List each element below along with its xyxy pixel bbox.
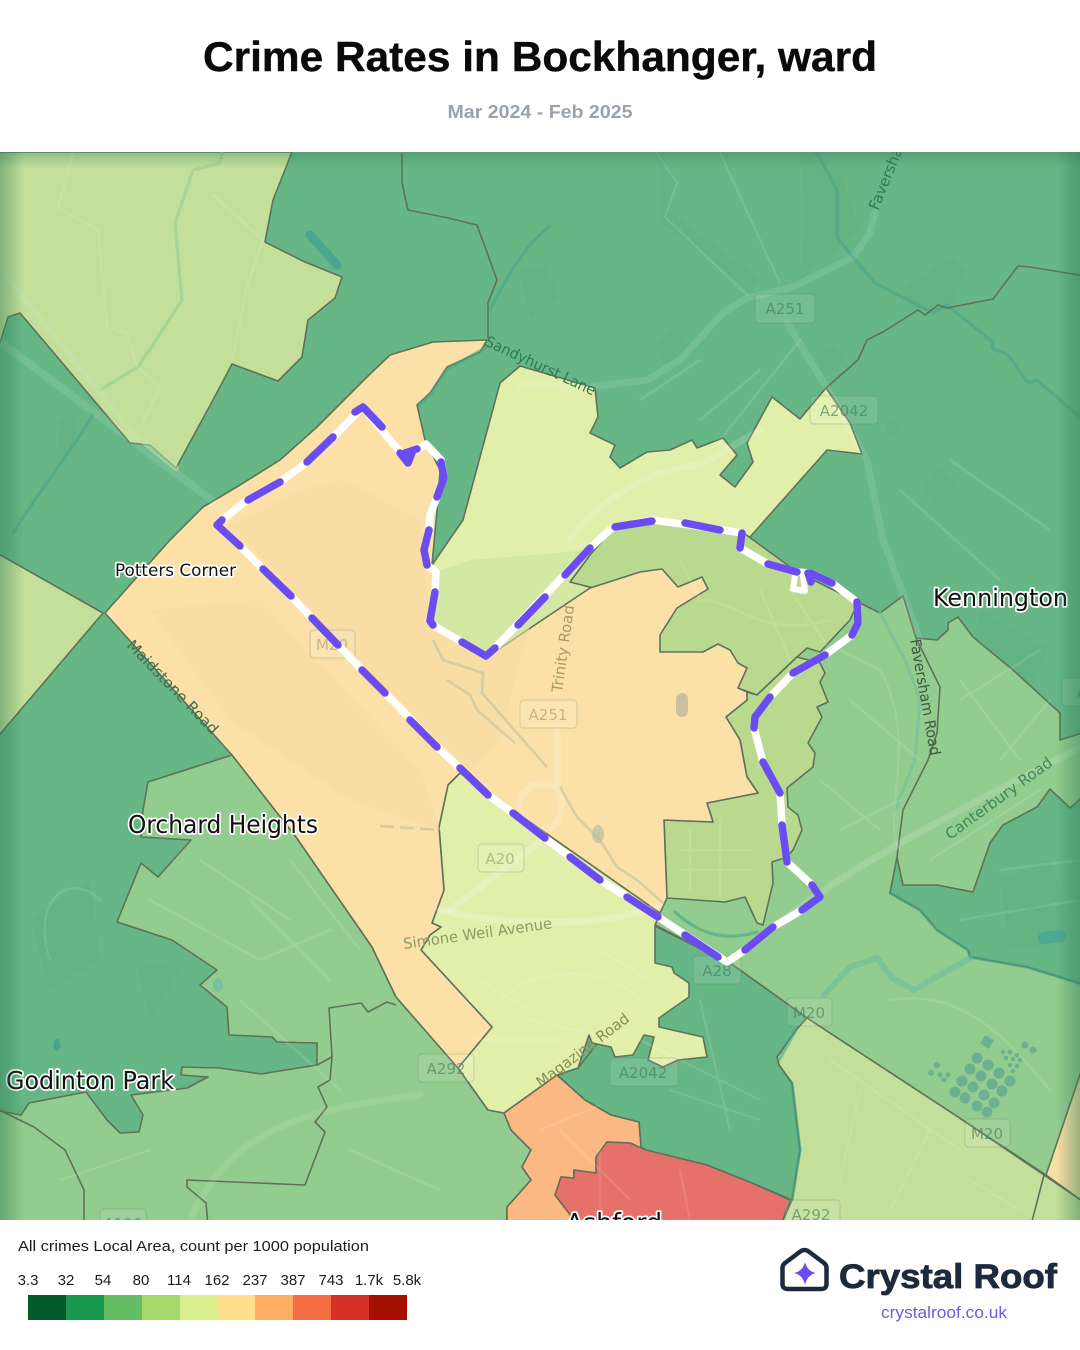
area: northern pale yellow-green — [432, 365, 863, 588]
area: south-west mid green — [0, 755, 531, 1225]
place label: Godinton Park: Godinton Park — [6, 1066, 174, 1095]
legend scale labels: 1.7k — [355, 1272, 384, 1289]
road labels: Canterbury Road — [942, 753, 1056, 843]
road shields: A20 — [485, 850, 515, 868]
legend scale labels: 32 — [58, 1272, 74, 1289]
area: southern dark green — [557, 925, 807, 1200]
ward boundary — [217, 407, 858, 962]
road shields: M20 — [793, 1004, 825, 1022]
legend colour swatches — [28, 1295, 407, 1320]
legend — [18, 1238, 422, 1320]
solar farm dots — [928, 1035, 1036, 1118]
logo: Crystal Roof — [782, 1250, 1058, 1322]
place label: Kennington: Kennington — [933, 584, 1068, 612]
road shields: A2042 — [820, 402, 868, 420]
place label: Potters Corner: Potters Corner — [115, 561, 236, 581]
website url: crystalroof.co.uk — [881, 1303, 1008, 1322]
legend scale labels: 162 — [204, 1272, 230, 1289]
road labels — [123, 145, 1056, 1091]
road shields: A251 — [766, 300, 804, 318]
road shields: A292 — [427, 1060, 465, 1078]
area: upper-left light green — [0, 152, 342, 468]
road shields: A251 — [529, 706, 567, 724]
legend scale labels: 114 — [167, 1272, 191, 1289]
legend scale labels: 54 — [95, 1272, 111, 1289]
title: Crime Rates in Bockhanger, ward — [203, 33, 877, 80]
dark tonal patches — [30, 153, 1075, 1150]
legend scale labels: 387 — [280, 1272, 306, 1289]
road labels: Simone Weil Avenue — [402, 914, 553, 953]
place label: Orchard Heights: Orchard Heights — [128, 810, 318, 839]
area: town centre red — [555, 1142, 790, 1225]
area: south-east light green — [777, 1018, 1080, 1225]
area: far right pale orange — [1046, 1072, 1080, 1198]
subtitle: date range: Mar 2024 - Feb 2025 — [448, 102, 632, 122]
area: south-west boundary lines — [0, 1002, 396, 1225]
legend scale labels: 743 — [318, 1272, 344, 1289]
legend scale labels: 3.3 — [18, 1272, 38, 1289]
area: central light green — [570, 522, 858, 695]
road labels: Sandyhurst Lane — [482, 332, 599, 399]
road shields: A292 — [792, 1206, 830, 1224]
place label: Ashford: Ashford — [566, 1208, 662, 1237]
area: left light green — [0, 552, 103, 740]
road labels: Faversha — [865, 145, 906, 212]
legend title: All crimes Local Area, count per 1000 population — [18, 1238, 369, 1255]
water features — [13, 153, 1080, 1200]
area: Bockhanger orange — [105, 340, 758, 1068]
area: ward interior shading — [497, 625, 530, 652]
road shields: A2042 — [619, 1064, 667, 1082]
road shields: A28 — [702, 962, 732, 980]
area: Kennington boundary — [897, 638, 940, 857]
area: southern pale yellow-green — [421, 773, 707, 1113]
legend scale labels: 5.8k — [393, 1272, 422, 1289]
legend scale labels: 237 — [242, 1272, 268, 1289]
area: town centre orange — [504, 1075, 646, 1225]
legend scale labels — [18, 1272, 422, 1289]
map edge vignette — [0, 152, 1080, 1220]
road labels: Maidstone Road — [123, 636, 222, 738]
road shields: M20 — [316, 636, 348, 654]
legend scale labels: 80 — [133, 1272, 149, 1289]
road shields — [100, 294, 1080, 1237]
area: east mid green — [655, 596, 1080, 1175]
road shields: M20 — [971, 1125, 1003, 1143]
road shields: A120 — [104, 1215, 142, 1233]
logo wordmark: Crystal Roof — [839, 1258, 1058, 1296]
motorway and road network — [0, 153, 1080, 1220]
road labels: Faversham Road — [906, 638, 944, 757]
road labels: Trinity Road — [548, 604, 578, 695]
ward and region boundary lines — [402, 153, 1080, 388]
icon: house with star — [782, 1250, 826, 1289]
road labels: Magazine Road — [533, 1009, 633, 1091]
area: inner pale green within ward — [431, 550, 590, 655]
